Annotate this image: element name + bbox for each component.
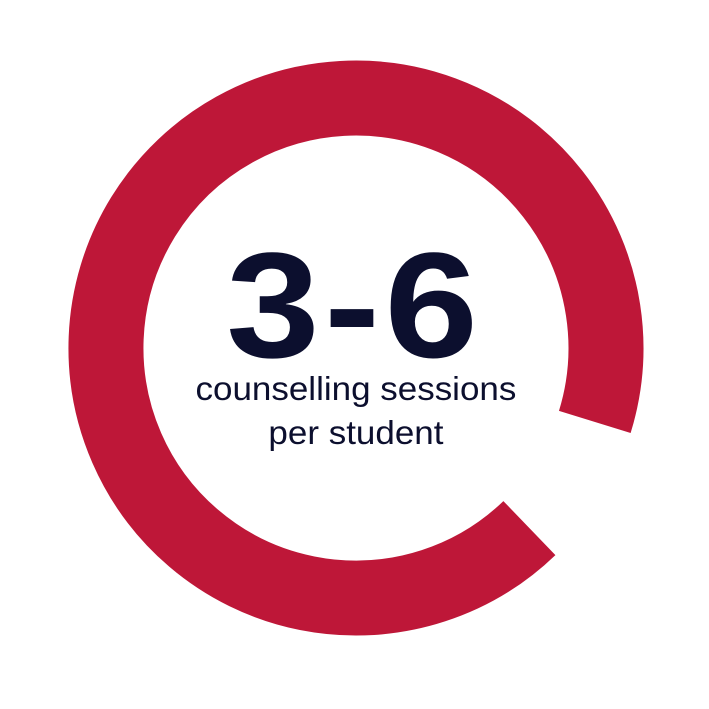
heading: 3-6: 3-6 — [226, 221, 482, 389]
subtitle text: counselling sessions — [196, 370, 516, 407]
subtitle text — [196, 370, 516, 451]
subtitle text: per student — [268, 414, 443, 451]
